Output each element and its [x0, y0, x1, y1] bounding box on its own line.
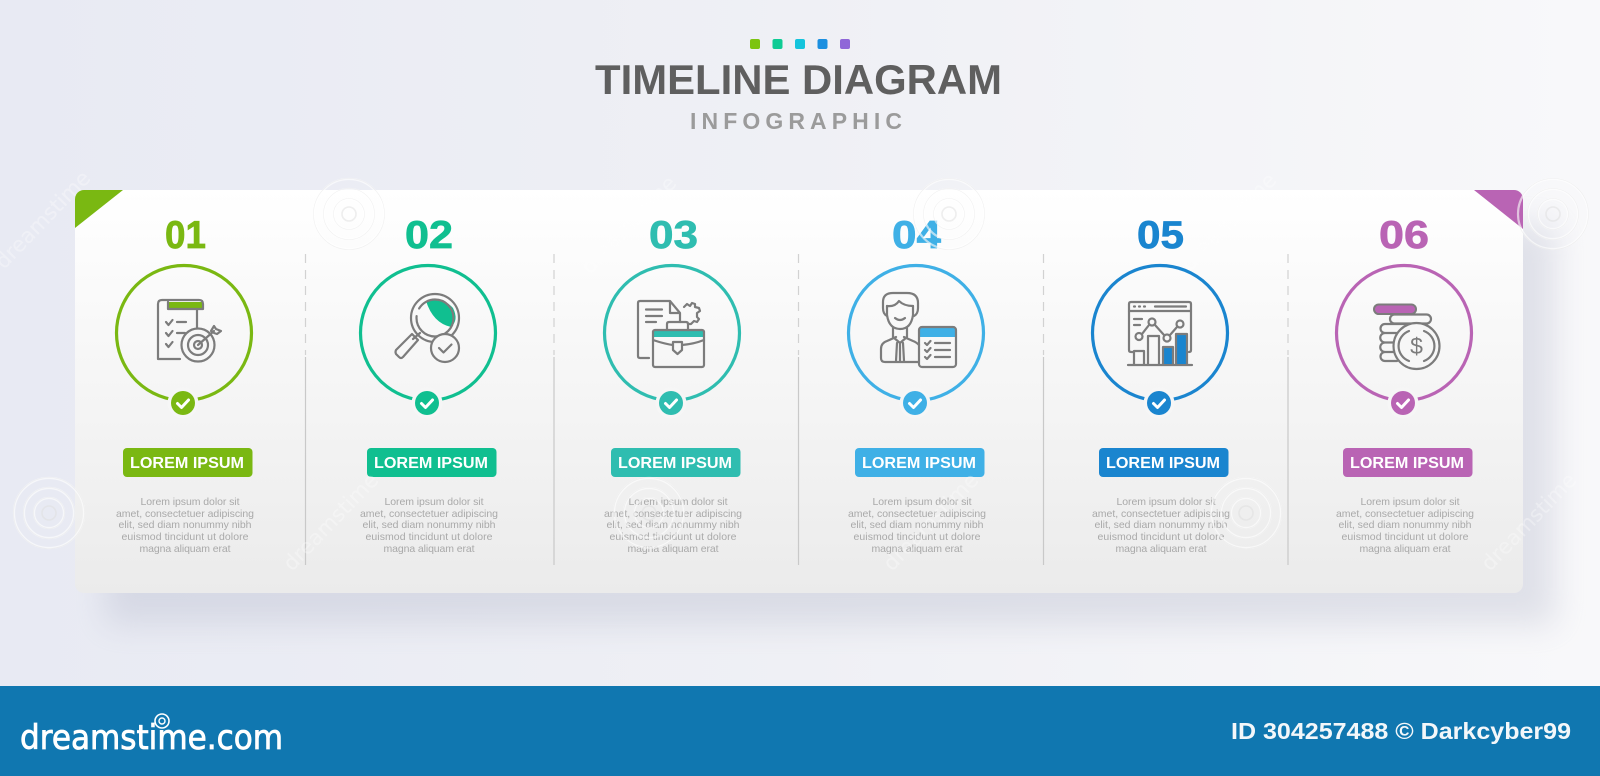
ring	[604, 266, 740, 400]
number 02: 02	[405, 214, 453, 257]
description: euismod tincidunt ut dolore	[122, 531, 249, 543]
description: magna aliquam erat	[628, 543, 719, 555]
description: Lorem ipsum dolor sit	[628, 496, 728, 508]
step 05	[1092, 214, 1230, 555]
description: Lorem ipsum dolor sit	[140, 496, 240, 508]
description: amet, consectetuer adipiscing	[1092, 508, 1230, 520]
watermark overlay	[0, 166, 1589, 575]
description: euismod tincidunt ut dolore	[610, 531, 737, 543]
description: magna aliquam erat	[384, 543, 475, 555]
label pill: LOREM IPSUM	[618, 455, 732, 472]
check badge	[656, 388, 686, 418]
corner: purple	[1474, 190, 1523, 229]
description: euismod tincidunt ut dolore	[1098, 531, 1225, 543]
icon: magnifier and check	[396, 294, 459, 362]
logo: dreamstime.com	[20, 718, 283, 758]
ring	[848, 266, 984, 400]
description: magna aliquam erat	[140, 543, 231, 555]
description	[848, 496, 986, 555]
check badge	[900, 388, 930, 418]
description: elit, sed diam nonummy nibh	[1338, 519, 1472, 531]
watermark overlay: dreamstime	[878, 468, 983, 575]
icon: coins	[1374, 304, 1440, 369]
watermark overlay: dreamstime	[278, 468, 383, 575]
main panel	[75, 190, 1523, 593]
description: amet, consectetuer adipiscing	[848, 508, 986, 520]
image credit: ID 304257488 © Darkcyber99	[1231, 718, 1571, 744]
column dividers	[306, 254, 1288, 565]
panel shadow	[105, 225, 1555, 625]
number 03: 03	[649, 214, 698, 257]
number 01: 01	[165, 214, 206, 257]
step 04	[848, 214, 986, 555]
description: Lorem ipsum dolor sit	[1116, 496, 1216, 508]
label pill: LOREM IPSUM	[130, 455, 244, 472]
label pill	[1343, 448, 1472, 477]
step 06	[1336, 214, 1474, 555]
description: elit, sed diam nonummy nibh	[606, 519, 740, 531]
watermark overlay: dreamstime	[1476, 468, 1581, 575]
description: amet, consectetuer adipiscing	[1336, 508, 1474, 520]
colour dots	[750, 39, 850, 49]
watermark overlay: dreamstime	[1176, 168, 1281, 275]
description: amet, consectetuer adipiscing	[360, 508, 498, 520]
description: magna aliquam erat	[1360, 543, 1451, 555]
number 05: 05	[1137, 214, 1184, 257]
description: magna aliquam erat	[872, 543, 963, 555]
icon: checklist and target	[158, 300, 221, 362]
description: amet, consectetuer adipiscing	[116, 508, 254, 520]
label pill	[611, 448, 740, 477]
description: Lorem ipsum dolor sit	[384, 496, 484, 508]
label pill	[367, 448, 496, 477]
description	[604, 496, 742, 555]
footer banner	[0, 686, 1600, 776]
description: euismod tincidunt ut dolore	[1342, 531, 1469, 543]
label pill: LOREM IPSUM	[374, 455, 488, 472]
label pill	[1099, 448, 1228, 477]
description: elit, sed diam nonummy nibh	[362, 519, 496, 531]
label pill: LOREM IPSUM	[1106, 455, 1220, 472]
description	[1092, 496, 1230, 555]
step 02	[360, 214, 498, 555]
description	[360, 496, 498, 555]
dollar sign: $	[1410, 333, 1423, 359]
number 04: 04	[892, 214, 941, 257]
number 06: 06	[1379, 214, 1429, 257]
description	[116, 496, 254, 555]
check badge	[412, 388, 442, 418]
description: euismod tincidunt ut dolore	[366, 531, 493, 543]
description	[1336, 496, 1474, 555]
label pill	[123, 448, 252, 477]
step 01	[116, 214, 254, 555]
ring	[360, 266, 496, 400]
description: amet, consectetuer adipiscing	[604, 508, 742, 520]
icon: businessman and schedule	[881, 293, 956, 367]
heading: TIMELINE DIAGRAM	[595, 56, 1002, 103]
description: elit, sed diam nonummy nibh	[850, 519, 984, 531]
check badge	[168, 388, 198, 418]
ring	[1092, 266, 1228, 400]
label pill	[855, 448, 984, 477]
subheading: INFOGRAPHIC	[690, 108, 902, 134]
label pill: LOREM IPSUM	[1350, 455, 1464, 472]
description: Lorem ipsum dolor sit	[1360, 496, 1460, 508]
label pill: LOREM IPSUM	[862, 455, 976, 472]
check badge	[1144, 388, 1174, 418]
check badge	[1388, 388, 1418, 418]
step 03	[604, 214, 742, 555]
icon: dashboard chart	[1128, 302, 1192, 365]
corner: green	[75, 190, 123, 228]
description: elit, sed diam nonummy nibh	[118, 519, 252, 531]
ring	[1336, 266, 1472, 400]
description: elit, sed diam nonummy nibh	[1094, 519, 1228, 531]
description: euismod tincidunt ut dolore	[854, 531, 981, 543]
title block	[595, 39, 1002, 134]
watermark overlay: dreamstime	[576, 171, 681, 278]
description: magna aliquam erat	[1116, 543, 1207, 555]
description: Lorem ipsum dolor sit	[872, 496, 972, 508]
icon: document, gear and briefcase	[638, 301, 704, 367]
ring	[116, 266, 252, 400]
